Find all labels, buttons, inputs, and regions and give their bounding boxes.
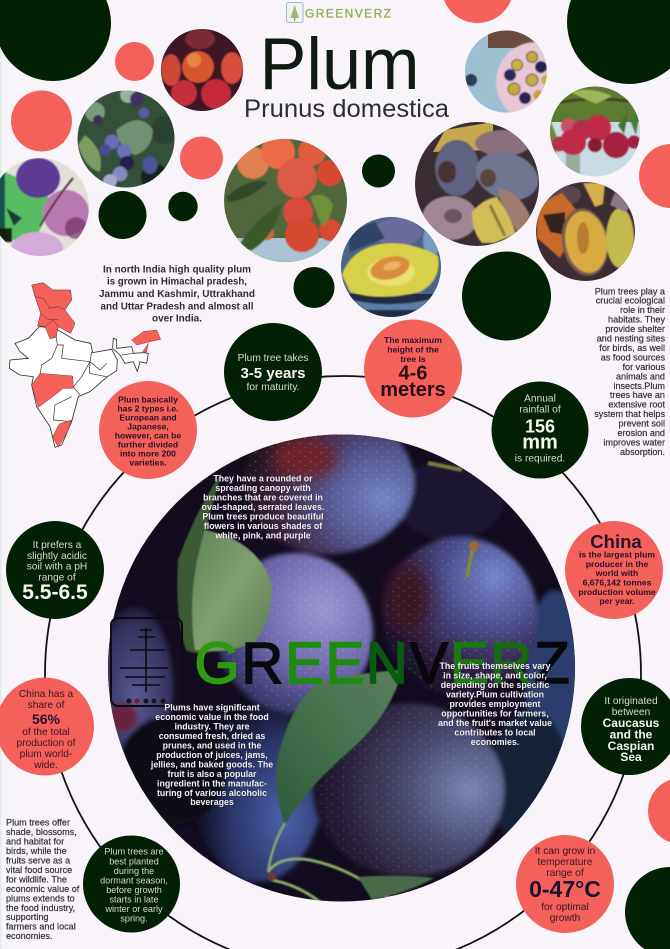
fact: planting season: starts in late (109, 894, 159, 904)
fact: planting season: before growth (106, 885, 162, 895)
text: shade and wildlife: economic value of (6, 884, 80, 894)
fact: plum types: Plum basically (118, 395, 178, 405)
fact: origin: between (612, 707, 650, 718)
photo: plum dessert plate (465, 30, 547, 112)
fact: origin: Caspian (608, 739, 654, 753)
text: fruit variety and cultivation (438, 661, 552, 747)
text: shade and wildlife: economies. (6, 931, 53, 941)
text: ecological role: for various (623, 362, 665, 372)
fact: temperature range: It can grow in (535, 846, 595, 857)
fact: China production share: plum world- (20, 749, 72, 760)
map: India with plum growing states (9, 283, 161, 447)
fact: soil pH: slightly acidic (27, 551, 87, 562)
text: canopy and leaves: They have a rounded or (213, 474, 313, 484)
fact: temperature range: growth (550, 913, 580, 924)
text: ecological role: trees have an (610, 390, 665, 400)
text: fruit variety and cultivation: depending on the specific (441, 680, 549, 690)
fact: maximum height: The maximum (384, 335, 442, 345)
text: canopy and leaves: oval-shaped, serrated leaves. (202, 502, 324, 512)
text: fruit variety and cultivation: and the fruit's market value (438, 718, 552, 728)
text: ecological role: absorption. (620, 447, 665, 457)
text: canopy and leaves: branches that are covered in (203, 493, 323, 503)
text: economic value: consumed fresh, dried as (159, 731, 265, 741)
fact: China production share: China has a (19, 689, 74, 700)
fact: soil pH (6, 521, 104, 619)
text: ecological role: improves water (603, 437, 665, 447)
fact: maximum height: height of the (387, 344, 439, 354)
text: canopy and leaves: Plum trees produce beautiful (202, 512, 324, 522)
watermark: large Greenverz logo: GREENVERZ (194, 631, 570, 696)
fact: temperature range: range of (546, 868, 584, 879)
text: north India growing regions: In north India high quality plum (103, 264, 251, 276)
fact: soil pH: soil with a pH (27, 562, 87, 572)
text: shade and wildlife: farmers and local (6, 922, 76, 932)
watermark: large Greenverz logo (111, 618, 570, 706)
text: shade and wildlife: shade, blossoms, (6, 827, 77, 837)
stems and lower leaf (268, 823, 434, 902)
text: ecological role: animals and (616, 371, 665, 381)
fact: China largest producer (565, 521, 663, 619)
text: shade and wildlife: vital food source (6, 865, 72, 875)
photo: red fruit cluster on branch (222, 135, 348, 268)
text: canopy and leaves: flowers in various shades of (204, 521, 322, 531)
text: canopy and leaves: spreading canopy with (215, 483, 311, 493)
fact: China production share: 56% (32, 711, 61, 727)
fact: planting season: spring. (120, 914, 148, 924)
fact: plum types: varieties. (129, 458, 167, 468)
fact: origin (581, 678, 670, 775)
photo: halved yellow plums (535, 181, 637, 283)
text: economic value: Plums have significant (164, 703, 260, 713)
text: ecological role: role in their (620, 305, 665, 315)
text: fruit variety and cultivation: The fruits themselves vary (440, 661, 551, 671)
fact: soil pH: It prefers a (33, 540, 82, 551)
text: ecological role: Plum trees play a (595, 286, 666, 296)
text: north India growing regions: over India. (152, 314, 202, 324)
subtitle: Prunus domestica (244, 95, 449, 123)
fact: plum types: however, can be (115, 431, 181, 441)
text: shade and wildlife: birds, while the (6, 846, 67, 856)
fact: China largest producer: per year. (599, 596, 635, 606)
fact: annual rainfall: rainfall of (519, 404, 561, 416)
logo (286, 2, 391, 22)
text: shade and wildlife: plums extends to (6, 893, 75, 903)
fact: China production share: production of (17, 738, 76, 749)
logo: GREENVERZ (305, 6, 391, 20)
fact: China production share: share of (28, 700, 65, 711)
fact: China largest producer: China (590, 531, 642, 552)
photo: plums on tree (78, 90, 174, 188)
fact: planting season: Plum trees are (104, 846, 164, 856)
fact: temperature range (516, 835, 614, 933)
fact: plum types: has 2 types i.e. (117, 404, 179, 414)
fact: plum types: into more 200 (120, 448, 176, 458)
fact: annual rainfall: mm (522, 432, 558, 454)
fact: China largest producer: 6,676,142 tonnes (583, 578, 652, 588)
photo: red plums on branch (549, 86, 641, 178)
fact: soil pH: 5.5-6.5 (22, 581, 88, 604)
text: shade and wildlife (6, 818, 80, 941)
photo: red plums pile (160, 28, 244, 112)
fact: years to maturity: for maturity. (246, 382, 300, 393)
text: shade and wildlife: and habitat for (6, 837, 64, 847)
text: economic value: fruit is also a popular (168, 769, 257, 779)
fact: planting season: dormant season, (100, 876, 168, 886)
fact: China largest producer: producer in the (586, 559, 648, 569)
text: fruit variety and cultivation: variety.Plum cultivation (446, 690, 544, 700)
fact: years to maturity (224, 323, 322, 421)
text: canopy and leaves (202, 474, 324, 541)
main plum photo circle (97, 410, 585, 904)
centre leaf (276, 670, 402, 825)
text: ecological role: erosion and (617, 428, 665, 438)
plum stem and twig (428, 463, 479, 577)
photo: purple plums with green leaf (0, 158, 89, 256)
text: shade and wildlife: the food industry, (6, 903, 75, 913)
fact: maximum height: 4-6 (399, 362, 427, 384)
text: shade and wildlife: supporting (6, 912, 48, 922)
fact: planting season: winter or early (104, 904, 163, 914)
fact: plum types: European and (119, 413, 177, 423)
fact: soil pH: range of (38, 572, 76, 584)
text: fruit variety and cultivation: economies. (471, 737, 519, 747)
text: economic value: production of juices, jams, (156, 750, 268, 760)
fact: China largest producer: production volume (578, 587, 656, 597)
text: ecological role: system that helps (594, 409, 665, 419)
fact: China largest producer: is the largest plum (579, 550, 655, 560)
text: ecological role: and nesting sites (597, 334, 665, 344)
fact: maximum height: tree is (400, 354, 426, 364)
fact: plum types (99, 381, 197, 479)
text: economic value: industry. They are (174, 722, 250, 732)
fact: origin: Sea (620, 750, 642, 764)
text: canopy and leaves: white, pink, and purple (214, 531, 311, 541)
text: shade and wildlife: Plum trees offer (6, 818, 70, 828)
text: ecological role: prevent soil (618, 418, 665, 428)
plum colour blotches and water drops (109, 412, 535, 874)
text: ecological role: for birds, as well (599, 343, 665, 353)
text: shade and wildlife: fruits serve as a (6, 856, 71, 866)
fact: temperature range: for optimal (541, 902, 589, 913)
fact: annual rainfall: Annual (524, 394, 556, 404)
connecting ring line (45, 376, 641, 949)
text: ecological role: insects.Plum (613, 381, 665, 391)
text: north India growing regions: Jammu and Kashmir, Uttrakhand (99, 289, 255, 300)
text: north India growing regions (99, 264, 255, 324)
photo: plum halves with stone (340, 216, 442, 320)
text: economic value: economic value in the food (155, 712, 269, 722)
fact: planting season (83, 836, 180, 932)
text: ecological role (594, 286, 666, 457)
text: ecological role: crucial ecological (596, 296, 665, 306)
text: economic value: beverages (190, 797, 234, 807)
fact: origin: It originated (604, 696, 658, 707)
fact: temperature range: 0-47°C (529, 876, 601, 902)
fact: maximum height (364, 320, 462, 418)
fact: annual rainfall (492, 382, 588, 478)
text: fruit variety and cultivation: contributes to local (454, 728, 536, 738)
text: fruit variety and cultivation: provides employment (450, 699, 541, 709)
text: economic value: jellies, and baked goods. The (150, 759, 273, 769)
text: ecological role: habitats. They (608, 315, 665, 325)
fact: maximum height: meters (380, 379, 446, 401)
text: economic value: prunes, and used in the (163, 740, 261, 750)
fact: plum types: Japanese, (127, 422, 169, 432)
fact: annual rainfall: 156 (525, 416, 555, 436)
fact: annual rainfall: is required. (515, 454, 565, 464)
fact: years to maturity: Plum tree takes (238, 353, 308, 364)
fact: China production share (0, 678, 94, 776)
fact: planting season: best planted (109, 856, 159, 866)
text: ecological role: provide shelter (605, 324, 665, 334)
text: north India growing regions: is grown in Himachal pradesh, (107, 276, 247, 288)
fact: planting season: during the (114, 866, 154, 876)
fact: temperature range: temperature (538, 857, 593, 868)
text: fruit variety and cultivation: in size, shape, and color, (443, 670, 547, 680)
text: fruit variety and cultivation: opportunities for farmers, (441, 708, 549, 718)
text: ecological role: as food sources (601, 352, 665, 362)
text: economic value: turing of various alcoholic (157, 788, 267, 798)
text: economic value (150, 703, 273, 807)
fact: China production share: of the total (22, 727, 70, 738)
text: economic value: ingredient in the manufac- (157, 778, 267, 788)
fact: years to maturity: 3-5 years (240, 365, 306, 382)
fact: origin: Caucasus (603, 716, 660, 730)
top-left leaf (177, 472, 272, 653)
fact: China largest producer: world with (595, 568, 638, 578)
text: shade and wildlife: for wildlife. The (6, 874, 67, 884)
fact: plum types: further divided (118, 440, 178, 450)
text: ecological role: extensive root (608, 400, 665, 410)
photo: frosted plums with cut half (414, 121, 545, 247)
fact: origin: and the (610, 728, 653, 742)
title: Plum (260, 24, 420, 105)
fact: China production share: wide. (33, 760, 58, 771)
text: north India growing regions: and Uttar Pradesh and almost all (100, 302, 254, 312)
